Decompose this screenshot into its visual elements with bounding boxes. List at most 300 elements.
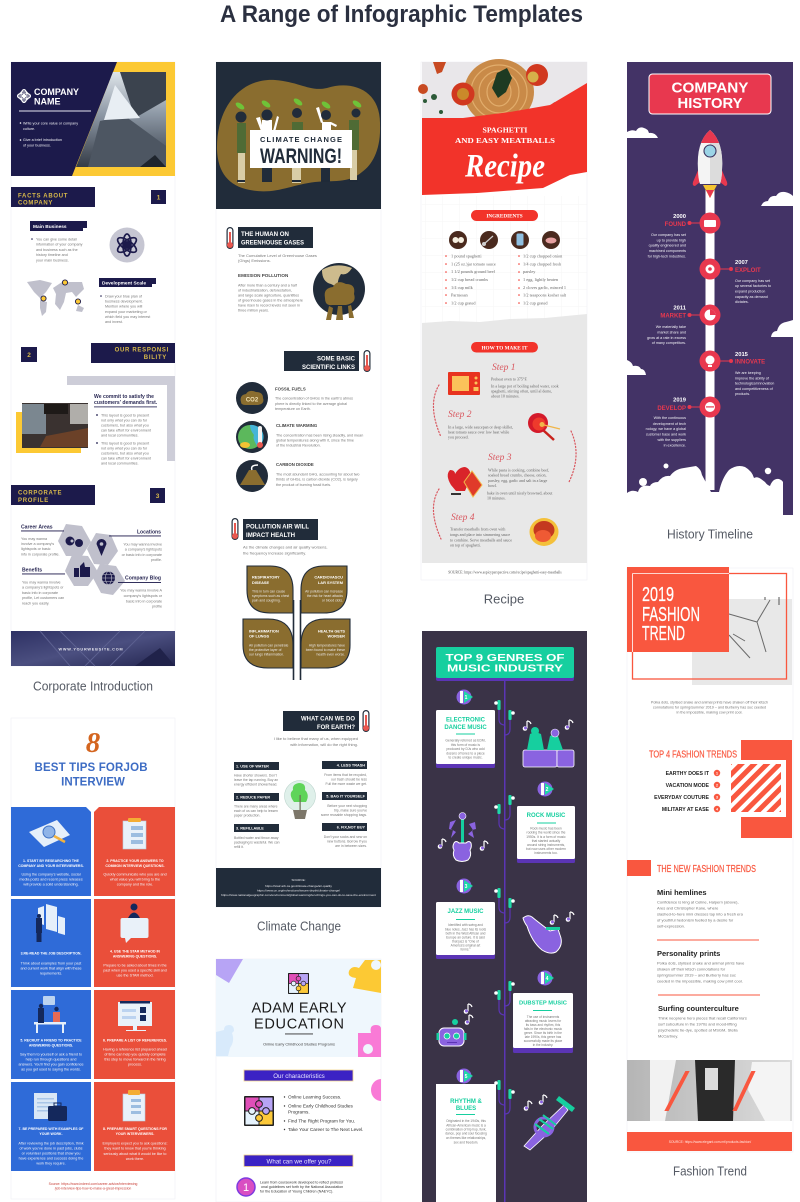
main business: history timeline and	[36, 253, 68, 257]
heading: human on greenhouse gases	[238, 227, 313, 248]
fashion source footer	[627, 1132, 792, 1151]
actions right: 4. LESS TRASH	[337, 764, 365, 768]
climate source footer	[216, 868, 381, 907]
actions left: Bottled water and throw away	[234, 836, 279, 840]
tip 3	[11, 899, 91, 987]
tip 2: 2. PRACTICE YOUR ANSWERS TO	[106, 859, 164, 863]
hexagon icons	[58, 524, 125, 595]
top 4 list: 4	[716, 807, 718, 811]
tip 6: process.	[128, 1062, 142, 1066]
emission pollution: and large scale agriculture, quantities	[238, 294, 299, 298]
tip 6: this step to move forward in the hiring	[104, 1058, 166, 1062]
icon: trumpet	[524, 1095, 575, 1150]
tip 2: company and the role.	[117, 882, 153, 886]
card: jazz music: Identified with swing and	[448, 923, 483, 927]
number badges: 3	[465, 884, 468, 890]
fashion intro text: in the impossible, making cow print cool.	[676, 710, 742, 714]
step 3: bowl.	[488, 483, 497, 488]
card: electronic dance music	[436, 710, 495, 768]
actions left	[234, 762, 280, 849]
ingredient list left	[445, 254, 496, 306]
main business: Main Business	[33, 224, 67, 230]
card: rock music: Rock music has been	[530, 826, 562, 830]
carbon dioxide: the product of burning fossil fuels.	[276, 483, 331, 487]
card: electronic dance music: dozens of tones to a piece	[446, 752, 485, 756]
heading: scientific links: SOME BASIC	[317, 356, 355, 362]
company blog: Company Blog	[125, 576, 161, 582]
actions right	[321, 761, 367, 848]
section: corporate profile: PROFILE	[18, 498, 49, 504]
step 2: In a large, wide saucepan or deep skillet,	[448, 424, 513, 430]
step 3: While pasta is cooking, combine beef,	[488, 468, 549, 474]
chart: four-leaf plant: LAR SYSTEM	[318, 580, 343, 585]
benefits: basic info in corporate	[22, 591, 58, 595]
company blog	[118, 576, 163, 608]
tip 8	[94, 1082, 175, 1171]
milestone 2007	[735, 260, 771, 304]
fossil fuels: FOSSIL FUELS	[275, 386, 306, 392]
top 4 heading: TOP 4 FASHION TRENDS	[649, 750, 737, 760]
top 4 list: 1	[716, 771, 718, 775]
banner: characteristics: Our characteristics	[273, 1073, 325, 1080]
locations: profile.	[151, 558, 162, 562]
rocket trail	[706, 190, 714, 490]
icon: earth and tree	[313, 263, 365, 320]
step 3	[448, 453, 553, 500]
history title: COMPANY	[672, 80, 748, 96]
milestone 2007: capacity as demand	[735, 295, 768, 299]
fossil fuels: phere is directly linked to the average global	[275, 402, 347, 406]
top 4 list	[654, 770, 720, 813]
tip 3: 3.RE-READ THE JOB DESCRIPTION.	[21, 952, 81, 956]
company blog: You may wanna involve A	[120, 588, 163, 592]
number 8: 8	[86, 727, 101, 759]
step 3: parsley, egg, garlic and salt in a large	[488, 478, 548, 484]
icon: puzzle	[244, 1096, 274, 1126]
panel: corporate introduction	[11, 62, 175, 666]
locations: You may wanna involve	[123, 542, 162, 546]
caption: recipe: Recipe	[484, 592, 524, 606]
milestone 2011: 2011	[673, 306, 687, 312]
number badges: 2	[546, 787, 549, 793]
card: electronic dance music: produced by DJs who add	[446, 747, 485, 751]
title: A Range of Infographic Templates	[220, 1, 583, 28]
commitment text: can take effort for environment	[101, 456, 151, 460]
card: jazz music	[436, 902, 495, 959]
card: electronic dance music: Generally referred as EDM,	[445, 738, 486, 742]
milestone 2015: 2015	[735, 352, 749, 358]
step 3: 10 minutes.	[487, 496, 506, 500]
step 4: on top of spaghetti.	[450, 542, 481, 548]
milestone 2015: technological innovation	[735, 382, 774, 386]
clouds	[627, 127, 793, 375]
new trends heading	[627, 860, 756, 876]
number badges: 5	[465, 1074, 468, 1080]
card: dubstep music	[513, 993, 573, 1053]
tip 5	[11, 990, 91, 1079]
icon: rocket	[693, 130, 727, 198]
card: dubstep music: The use of instruments	[527, 1015, 560, 1019]
tip 7: of work you've done in past jobs, clubs	[19, 1146, 83, 1150]
career areas: involve a company's	[21, 542, 54, 546]
tip 7: After reviewing the job description, think	[18, 1142, 84, 1146]
development scale: Mention where you will	[105, 304, 142, 308]
tip 7: or volunteer positions that show you	[22, 1152, 80, 1156]
carbon dioxide: CARBON DIOXIDE	[276, 462, 314, 467]
climate source footer: SOURCE:	[291, 878, 306, 882]
milestone 2015	[735, 352, 774, 396]
actions right: trip, make sure you've	[334, 808, 367, 812]
food photo	[418, 59, 587, 126]
music title: TOP 9 GENRES OF	[446, 653, 564, 664]
milestone 2015: and competitiveness of	[735, 387, 774, 391]
tip 6: of time can help you quickly complete	[104, 1052, 166, 1056]
fashion cover: FASHION	[642, 604, 700, 626]
development scale: business development.	[105, 300, 143, 304]
offer item one: 1	[243, 1182, 249, 1194]
heading: pollution air	[232, 518, 318, 540]
actions right: some reusable shopping bags.	[321, 813, 367, 817]
tip 8: seriously about what it would be like to	[104, 1152, 166, 1156]
warning banner	[250, 130, 352, 168]
main business: your main business.	[36, 258, 69, 262]
card: electronic dance music: this form of music is	[451, 743, 480, 747]
locations: Locations	[137, 530, 161, 536]
tip 5: 5. RECRUIT A FRIEND TO PRACTICE	[20, 1038, 82, 1042]
emission pollution: After more than a century and a half	[238, 284, 298, 288]
card: rock music	[517, 806, 575, 863]
pollution intro text: As the climate changes and air quality worsens,	[243, 544, 328, 550]
commitment text: not only what you can do for	[101, 418, 148, 422]
step 2: heat tomato sauce over low heat while	[448, 430, 510, 434]
tip 4: ANSWERING QUESTIONS.	[113, 954, 157, 958]
emission pollution: EMISSION POLLUTION	[238, 273, 289, 278]
top 4 list: MILITARY AT EASE	[662, 807, 710, 813]
milestone 2011: of many competitors.	[652, 341, 686, 345]
mini hemlines	[657, 888, 759, 940]
characteristics list: Online Early Childhood Studies	[288, 1104, 354, 1108]
chart: four-leaf plant: DISEASE	[252, 580, 269, 585]
milestone 2000: machined components	[649, 249, 686, 253]
step 1: In a large pot of boiling salted water, cook	[491, 384, 559, 390]
section: corporate profile: 3	[156, 493, 160, 500]
emission pollution	[238, 273, 303, 312]
main business: information of your company	[36, 242, 83, 246]
company blog: profile	[152, 604, 162, 608]
personality prints: Personality prints	[657, 949, 720, 958]
tip 4: 4. USE THE STAR METHOD IN	[110, 950, 160, 954]
tip 8: Employers expect you to ask questions:	[103, 1142, 167, 1146]
tip 8: 8. PREPARE SMART QUESTIONS FOR	[103, 1127, 167, 1131]
milestone 2007: 2007	[735, 260, 748, 266]
card: dubstep music: falls in the electronic music	[524, 1027, 562, 1031]
actions left: refill it.	[234, 845, 244, 849]
chart: four-leaf plant: INFLAMMATION	[249, 628, 279, 634]
icon: light bulb with tree	[284, 780, 316, 819]
tip 7: work they require.	[36, 1162, 66, 1166]
actions right: Before your next shopping	[327, 804, 367, 808]
personality prints: ceeded in the impossible, making cow print cool.	[657, 978, 743, 984]
step 3: soaked bread crumbs, cheese, onion,	[488, 472, 547, 478]
tip 6: 6. PREPARE A LIST OF REFERENCES.	[103, 1038, 167, 1042]
ingredient list left: 1/2 cup bread crumbs	[451, 277, 488, 282]
commitment text: customers' demands first.	[94, 400, 158, 406]
tip 1: media posts and recent press releases	[19, 878, 83, 882]
step 1: Preheat oven to 375°F.	[491, 376, 527, 382]
top 4 list: 3	[716, 795, 718, 799]
source note: /job-interview-tips-how-to-make-a-great-impression	[55, 1186, 131, 1190]
actions left: each of us can help to lessen	[234, 809, 278, 813]
actions right: 5. BAG IT YOURSELF	[326, 794, 366, 798]
tip 6	[94, 990, 175, 1079]
company name: COMPANY	[34, 87, 79, 97]
dotted arrows	[433, 385, 576, 539]
chart: four-leaf plant: CARDIOVASCU	[314, 574, 343, 580]
development scale: which field you may interest	[105, 315, 150, 319]
tip 8: they want to know that you're thinking	[104, 1146, 166, 1150]
actions left: 1. USE OF WATER	[236, 764, 269, 768]
chart: four-leaf plant: HEALTH GETS	[318, 628, 345, 634]
recipe title	[455, 126, 555, 184]
card: rock music: that started actually	[532, 839, 561, 843]
surfing counterculture: McCartney.	[658, 1034, 678, 1038]
header bullets: culture.	[23, 127, 35, 131]
top 4 list: VACATION MODE	[666, 783, 710, 789]
chart: four-leaf plant: the protective layer of	[249, 648, 281, 652]
mini hemlines: of youthful hedonism fuelled by a desire for	[657, 918, 734, 922]
icon: atom	[110, 228, 144, 262]
development scale: Draw your blue plan of	[105, 294, 143, 298]
characteristics list: Online Learning Success.	[288, 1094, 341, 1100]
milestone 2015: INNOVATE	[735, 360, 765, 366]
icon: puzzle logo	[288, 973, 309, 994]
recipe title: SPAGHETTI	[483, 126, 527, 134]
icon: company logo	[18, 90, 30, 102]
earth intro text: I like to believe that many of us, when equipped	[274, 736, 358, 741]
music title: MUSIC INDUSTRY	[447, 664, 563, 674]
timeline nodes	[688, 212, 733, 418]
card: rock music: 1950s. It is a form of music	[526, 835, 566, 839]
tip 8: YOUR INTERVIEWERS.	[116, 1132, 154, 1136]
development scale: and invest.	[105, 320, 123, 324]
actions left: energy efficient showerhead.	[234, 782, 277, 786]
commitment text: We commit to satisfy the	[94, 394, 154, 400]
heading: scientific links: SCIENTIFIC LINKS	[302, 364, 355, 371]
milestone 2000: up to provide high	[657, 238, 686, 242]
card: rock music: ROCK MUSIC	[527, 813, 566, 819]
tip 1: will provide a solid understanding.	[23, 882, 79, 886]
tip 6: Having a reference list prepared ahead	[103, 1048, 167, 1052]
emission pollution: of greenhouse gases in the atmosphere	[238, 298, 303, 302]
ingredient list right	[518, 254, 567, 306]
top 4 list: 2	[716, 783, 718, 787]
card: jazz music: both in the West African and	[446, 932, 486, 936]
tip 5: help run through questions and	[26, 1058, 76, 1062]
milestone 2019: nology, we have a global	[646, 427, 686, 431]
panel: recipe	[418, 59, 587, 580]
icon: guitar	[438, 812, 488, 862]
milestone 2000	[648, 214, 687, 258]
header bullets: Write your core value or company	[23, 122, 78, 126]
banner: offer: What can we offer you?	[267, 1158, 332, 1165]
fossil fuels: temperature on Earth.	[275, 407, 311, 411]
fashion cover: 2019	[642, 584, 674, 606]
section: facts about company: 1	[157, 194, 161, 202]
career areas	[21, 524, 64, 556]
main business: You can give some detail	[36, 238, 77, 242]
section: facts about company	[11, 187, 166, 207]
commitment text	[94, 394, 158, 466]
card: rhythm and blues: dance, pop and soul focusing	[445, 1132, 487, 1136]
benefits: profile, Let customers can	[22, 596, 64, 600]
development scale	[99, 278, 156, 324]
tip 2	[94, 807, 175, 896]
milestone 2007: up several factories to	[735, 284, 771, 288]
how to make it pill: HOW TO MAKE IT	[482, 346, 528, 352]
milestone 2000: FOUND	[665, 222, 687, 228]
top 4 list: EARTHY DOES IT	[666, 771, 710, 777]
actions right: new buttons. Borrow if you	[327, 840, 367, 844]
tip 8: work there.	[126, 1157, 144, 1161]
offer item one: for the Education of Young Children (NAEYC).	[260, 1190, 333, 1194]
chart: four-leaf plant	[243, 566, 350, 680]
card: dubstep music: its bass and rhythm, this	[526, 1023, 561, 1027]
fossil fuels: The concentration of GHGs in the earth's atmos	[275, 396, 353, 400]
tip 3: Think about examples from your past	[21, 962, 81, 966]
heading: pollution air: IMPACT HEALTH	[246, 532, 295, 539]
ingredient list left: Parmesan	[451, 292, 469, 298]
new trends heading: THE NEW FASHION TRENDS	[657, 864, 756, 875]
interview title: BEST TIPS FORJOB	[34, 762, 148, 774]
characteristics list: Find The Right Program for You.	[288, 1118, 355, 1124]
card: jazz music: blue notes, Jazz has its roots	[445, 928, 486, 932]
locations: or basic info in corporate	[122, 553, 162, 557]
main business	[30, 221, 87, 262]
milestone 2000: 2000	[673, 214, 686, 220]
actions right: 6. FIX,NOT BUY	[337, 826, 365, 830]
climate source footer: https://www.nationalgeographic.com/environment/global-warming/ten-things-you-can-do-to-save-the-environment	[221, 893, 376, 897]
tip 5: Say them to yourself or ask a friend to	[20, 1052, 82, 1056]
caption: history timeline: History Timeline	[667, 526, 753, 542]
card: dubstep music: DUBSTEP MUSIC	[519, 1000, 568, 1006]
surfing counterculture	[658, 1004, 747, 1038]
chart: four-leaf plant: our lungs inflammation.	[249, 652, 284, 656]
milestone 2015: improve the ability of	[735, 376, 770, 380]
banner: offer	[244, 1155, 353, 1166]
chart: four-leaf plant: the risk for heart attacks	[307, 594, 343, 598]
company blog: company's lightspots or	[124, 594, 163, 598]
ingredient list left: 1 (25 oz.)jar tomato sauce	[451, 262, 496, 266]
characteristics list	[284, 1094, 363, 1132]
milestone 2019	[646, 398, 687, 448]
milestone 2019: 2019	[673, 398, 687, 404]
tip 1	[11, 807, 91, 896]
ingredient list left: 1 1/2 pounds ground beef	[451, 269, 495, 274]
ingredient list right: 1/2 cup chopped onion	[523, 254, 563, 258]
panel: interview tips	[11, 718, 175, 1199]
heading: human on greenhouse gases: GREENHOUSE GASES	[241, 240, 304, 246]
tip 2: COMMON INTERVIEW QUESTIONS.	[105, 864, 165, 868]
card: rhythm and blues	[436, 1084, 496, 1202]
milestone 2000: for high-tech industries.	[648, 254, 686, 258]
offer item one: onal guidelines set forth by the National Association	[261, 1185, 343, 1189]
mini hemlines: slashed-to-here mini dresses tap into a fresh era	[657, 912, 744, 916]
milestone 2019: with the suppliers	[658, 438, 686, 442]
warning banner: WARNING!	[260, 145, 342, 168]
commitment text: and local communities.	[101, 462, 139, 466]
chart: four-leaf plant: or blood clots.	[322, 598, 343, 602]
climate warming: global temperatures along with it, since the time	[276, 438, 354, 442]
footer band	[11, 631, 175, 666]
education subtitle: Online Early Childhood Studies Programs	[263, 1042, 335, 1046]
fashion photo strip	[627, 1060, 792, 1121]
card: rock music: rocking the world since the	[526, 830, 566, 834]
career areas: Career Areas	[21, 524, 53, 530]
milestone 2019: in excellence.	[664, 444, 686, 448]
caption: climate change: Climate Change	[257, 918, 341, 934]
world map	[27, 280, 84, 316]
mini hemlines: self-expression.	[657, 924, 685, 928]
ingredient list right: parsley	[523, 269, 536, 274]
education title: EDUCATION	[254, 1016, 344, 1032]
section: our responsibility: OUR RESPONSI	[115, 348, 169, 354]
heading: pollution air: POLLUTION AIR WILL	[246, 524, 309, 530]
section: facts about company: FACTS ABOUT	[18, 194, 68, 200]
tip 7: YOUR WORK.	[39, 1132, 63, 1136]
education title: ADAM EARLY	[252, 1000, 347, 1016]
personality prints	[657, 949, 760, 996]
ingredients pill: INGREDIENTS	[486, 214, 523, 220]
locations	[109, 530, 162, 562]
climate source footer: https://www.un.org/en/sections/issues-depth/climate-change/	[257, 888, 340, 892]
actions left: leave the tap running. Buy an	[234, 778, 278, 782]
actions left: paper production.	[234, 814, 260, 818]
recipe title: Recipe	[464, 148, 545, 184]
actions left: Have shorter showers. Don't	[234, 774, 277, 778]
benefits: a company's lightspots or	[22, 586, 64, 590]
actions left: 2. REDUCE PAPER	[236, 796, 270, 800]
step 2	[448, 410, 560, 440]
actions left: 3. REFILLABLE	[236, 826, 264, 830]
ingredient list left: 1 pound spaghetti	[451, 254, 482, 258]
characteristics list: Take Your Career to The Next Level.	[288, 1127, 363, 1132]
personality prints: shaken off their kitsch connotations for	[657, 966, 726, 972]
number badges: 1	[465, 695, 468, 701]
climate warming: CLIMATE WARMING	[276, 423, 318, 428]
actions right: From items that be recycled,	[324, 773, 367, 777]
tip 3: requirements.	[40, 972, 62, 976]
tip 7: have experience and success doing the	[19, 1156, 83, 1160]
commitment text: customers, but also what you	[101, 424, 149, 428]
step 4: to combine. Serve meatballs and sauce	[450, 538, 512, 542]
chart: four-leaf plant: This in turn can cause	[252, 590, 285, 594]
caption: corporate introduction: Corporate Introduction	[33, 678, 153, 694]
milestone 2011: market share and	[657, 330, 686, 334]
fossil fuels: CO2	[246, 398, 259, 404]
commitment text: can take effort for environment	[101, 428, 151, 432]
pollution intro text: the frequency increase significantly.	[243, 550, 306, 556]
locations: a company's lightspots	[125, 548, 162, 552]
development scale: Development Scale	[102, 280, 146, 286]
card: jazz music: Europe an culture. It is said	[446, 936, 485, 940]
meeting photo	[16, 403, 88, 453]
surfing counterculture: surf subculture in the 1970s and mood-lifting	[658, 1022, 737, 1026]
fashion intro text: Polka dots, stylised snake and animal prints have shaken off their kitsch	[651, 700, 768, 704]
step 3: Step 3	[488, 453, 512, 463]
surfing counterculture: Think neoprene hero pieces that recall California's	[658, 1016, 747, 1020]
interview title: INTERVIEW	[61, 776, 125, 788]
card: rhythm and blues: Originated in the 1940s, this	[446, 1119, 486, 1123]
